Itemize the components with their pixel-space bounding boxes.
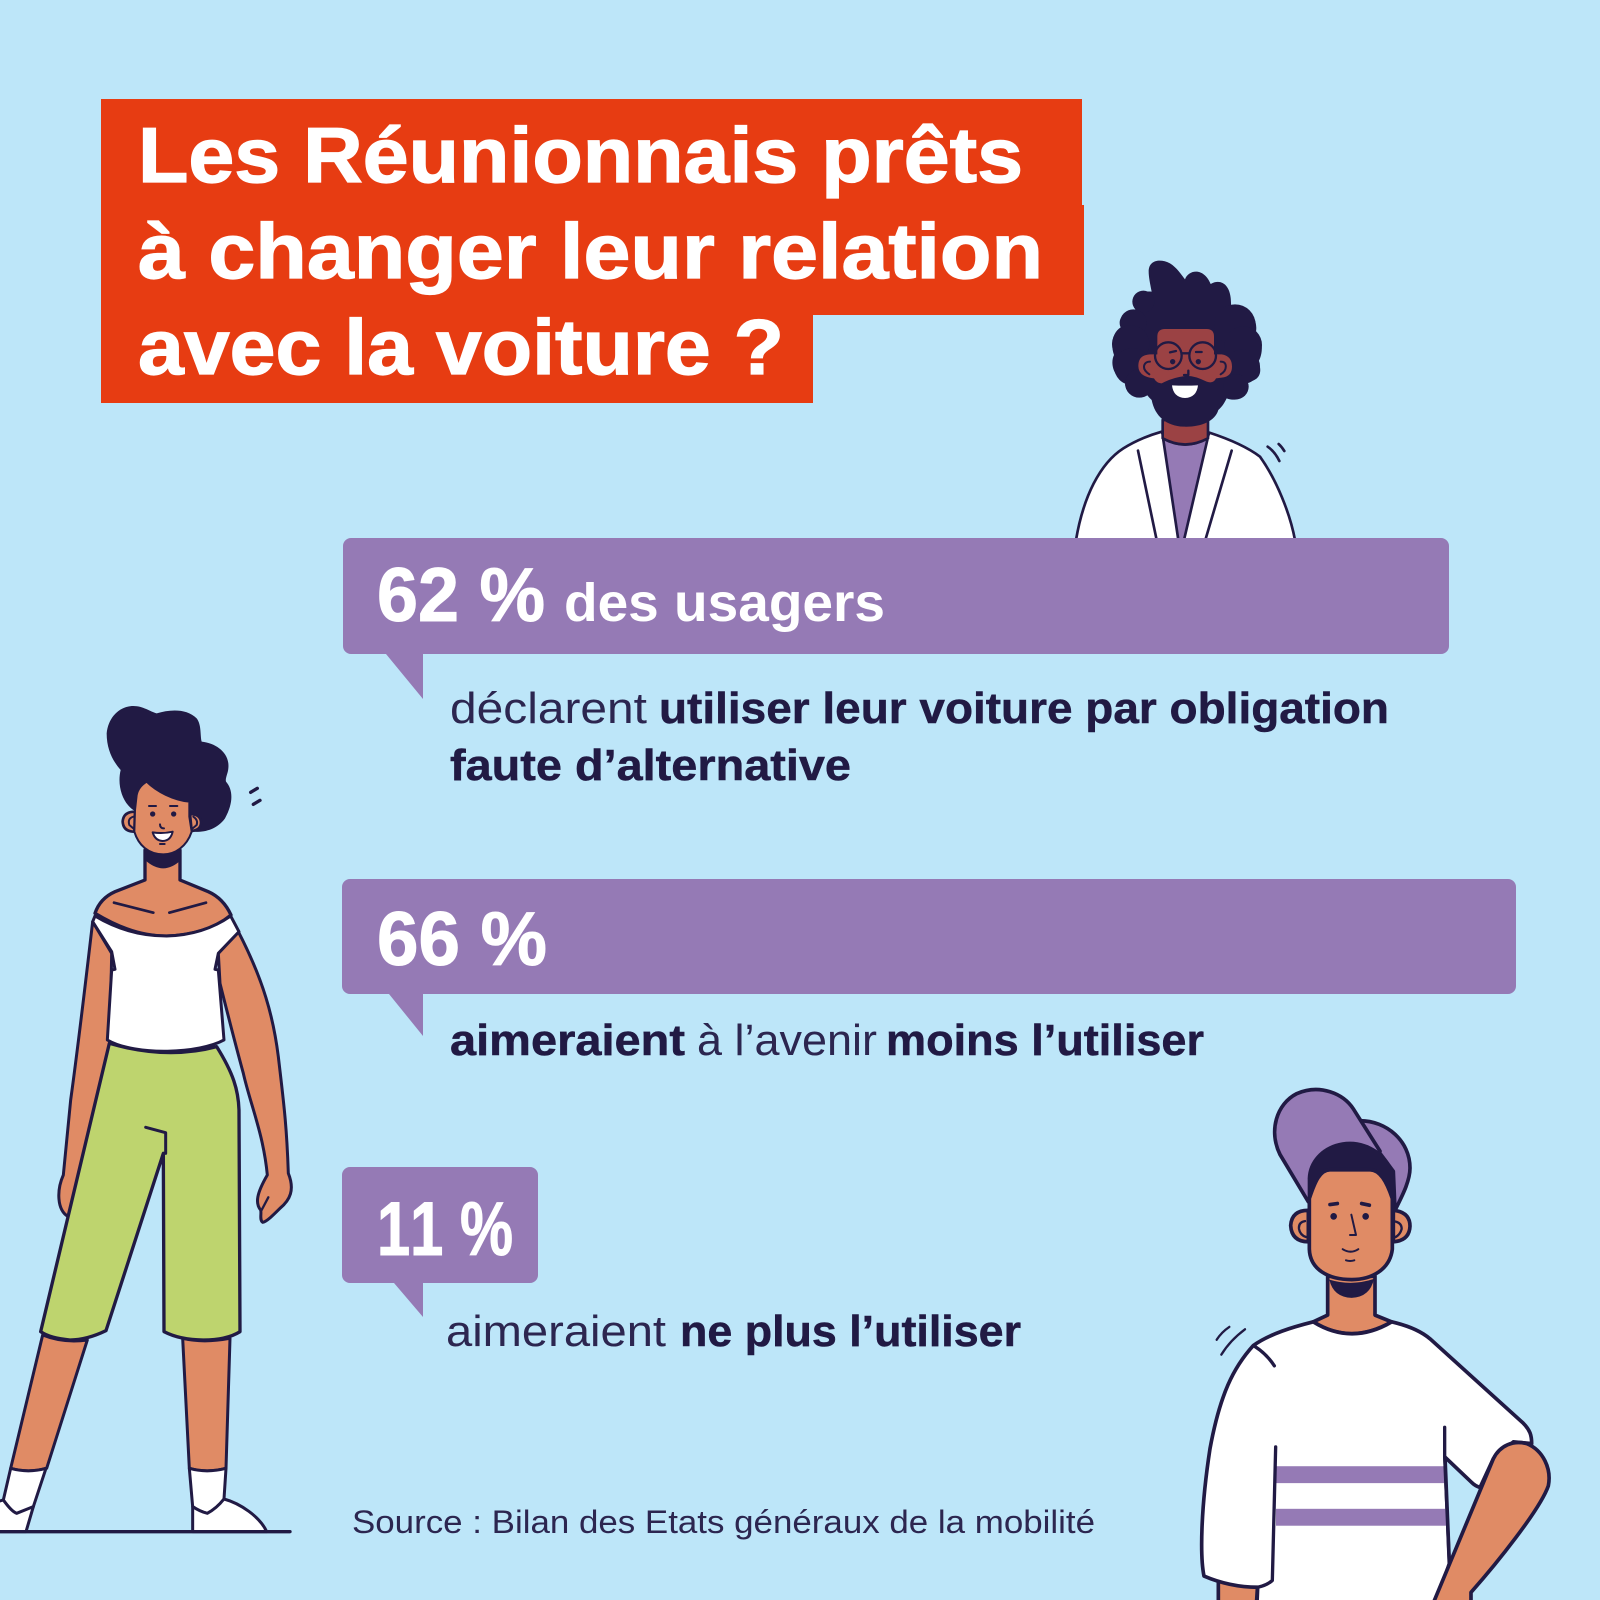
text: déclarent utiliser leur voiture par obligation faute d'alternative: déclarent	[450, 684, 647, 733]
title block	[101, 99, 1084, 403]
text: déclarent utiliser leur voiture par obligation faute d'alternative: utiliser leur voiture par obligation	[659, 684, 1389, 733]
title block: à changer leur relation	[138, 207, 1043, 295]
text: aimeraient ne plus l'utiliser	[446, 1307, 1021, 1356]
text: déclarent utiliser leur voiture par obligation faute d'alternative	[450, 684, 1389, 790]
panel: 11 %	[342, 1167, 538, 1317]
text: aimeraient ne plus l'utiliser: ne plus l’utiliser	[680, 1307, 1021, 1356]
panel: 66 %: 66 %	[377, 897, 547, 982]
panel: 62 % des usagers: 62 %	[377, 553, 545, 638]
panel: 66 %	[342, 879, 1516, 1036]
panel: 62 % des usagers	[343, 538, 1449, 699]
panel: 11 %: 11 %	[377, 1187, 513, 1272]
illustration: woman standing	[0, 706, 291, 1532]
illustration: man with glasses and beard	[1076, 261, 1295, 540]
text: aimeraient à l'avenir moins l'utiliser	[450, 1016, 1204, 1065]
text: aimeraient à l'avenir moins l'utiliser: aimeraient	[450, 1016, 685, 1065]
panel: 62 % des usagers: des usagers	[564, 573, 885, 633]
illustration: young man with cap	[1202, 1090, 1549, 1600]
text: déclarent utiliser leur voiture par obligation faute d'alternative: faute d’alternative	[450, 741, 851, 790]
text: aimeraient à l'avenir moins l'utiliser: à l’avenir	[697, 1016, 877, 1065]
text: aimeraient à l'avenir moins l'utiliser: moins l’utiliser	[886, 1016, 1204, 1065]
title block: Les Réunionnais prêts	[138, 111, 1023, 199]
text: aimeraient ne plus l'utiliser: aimeraient	[446, 1307, 666, 1356]
title block: avec la voiture ?	[138, 303, 784, 391]
source line: Source : Bilan des Etats généraux de la mobilité	[352, 1504, 1095, 1540]
